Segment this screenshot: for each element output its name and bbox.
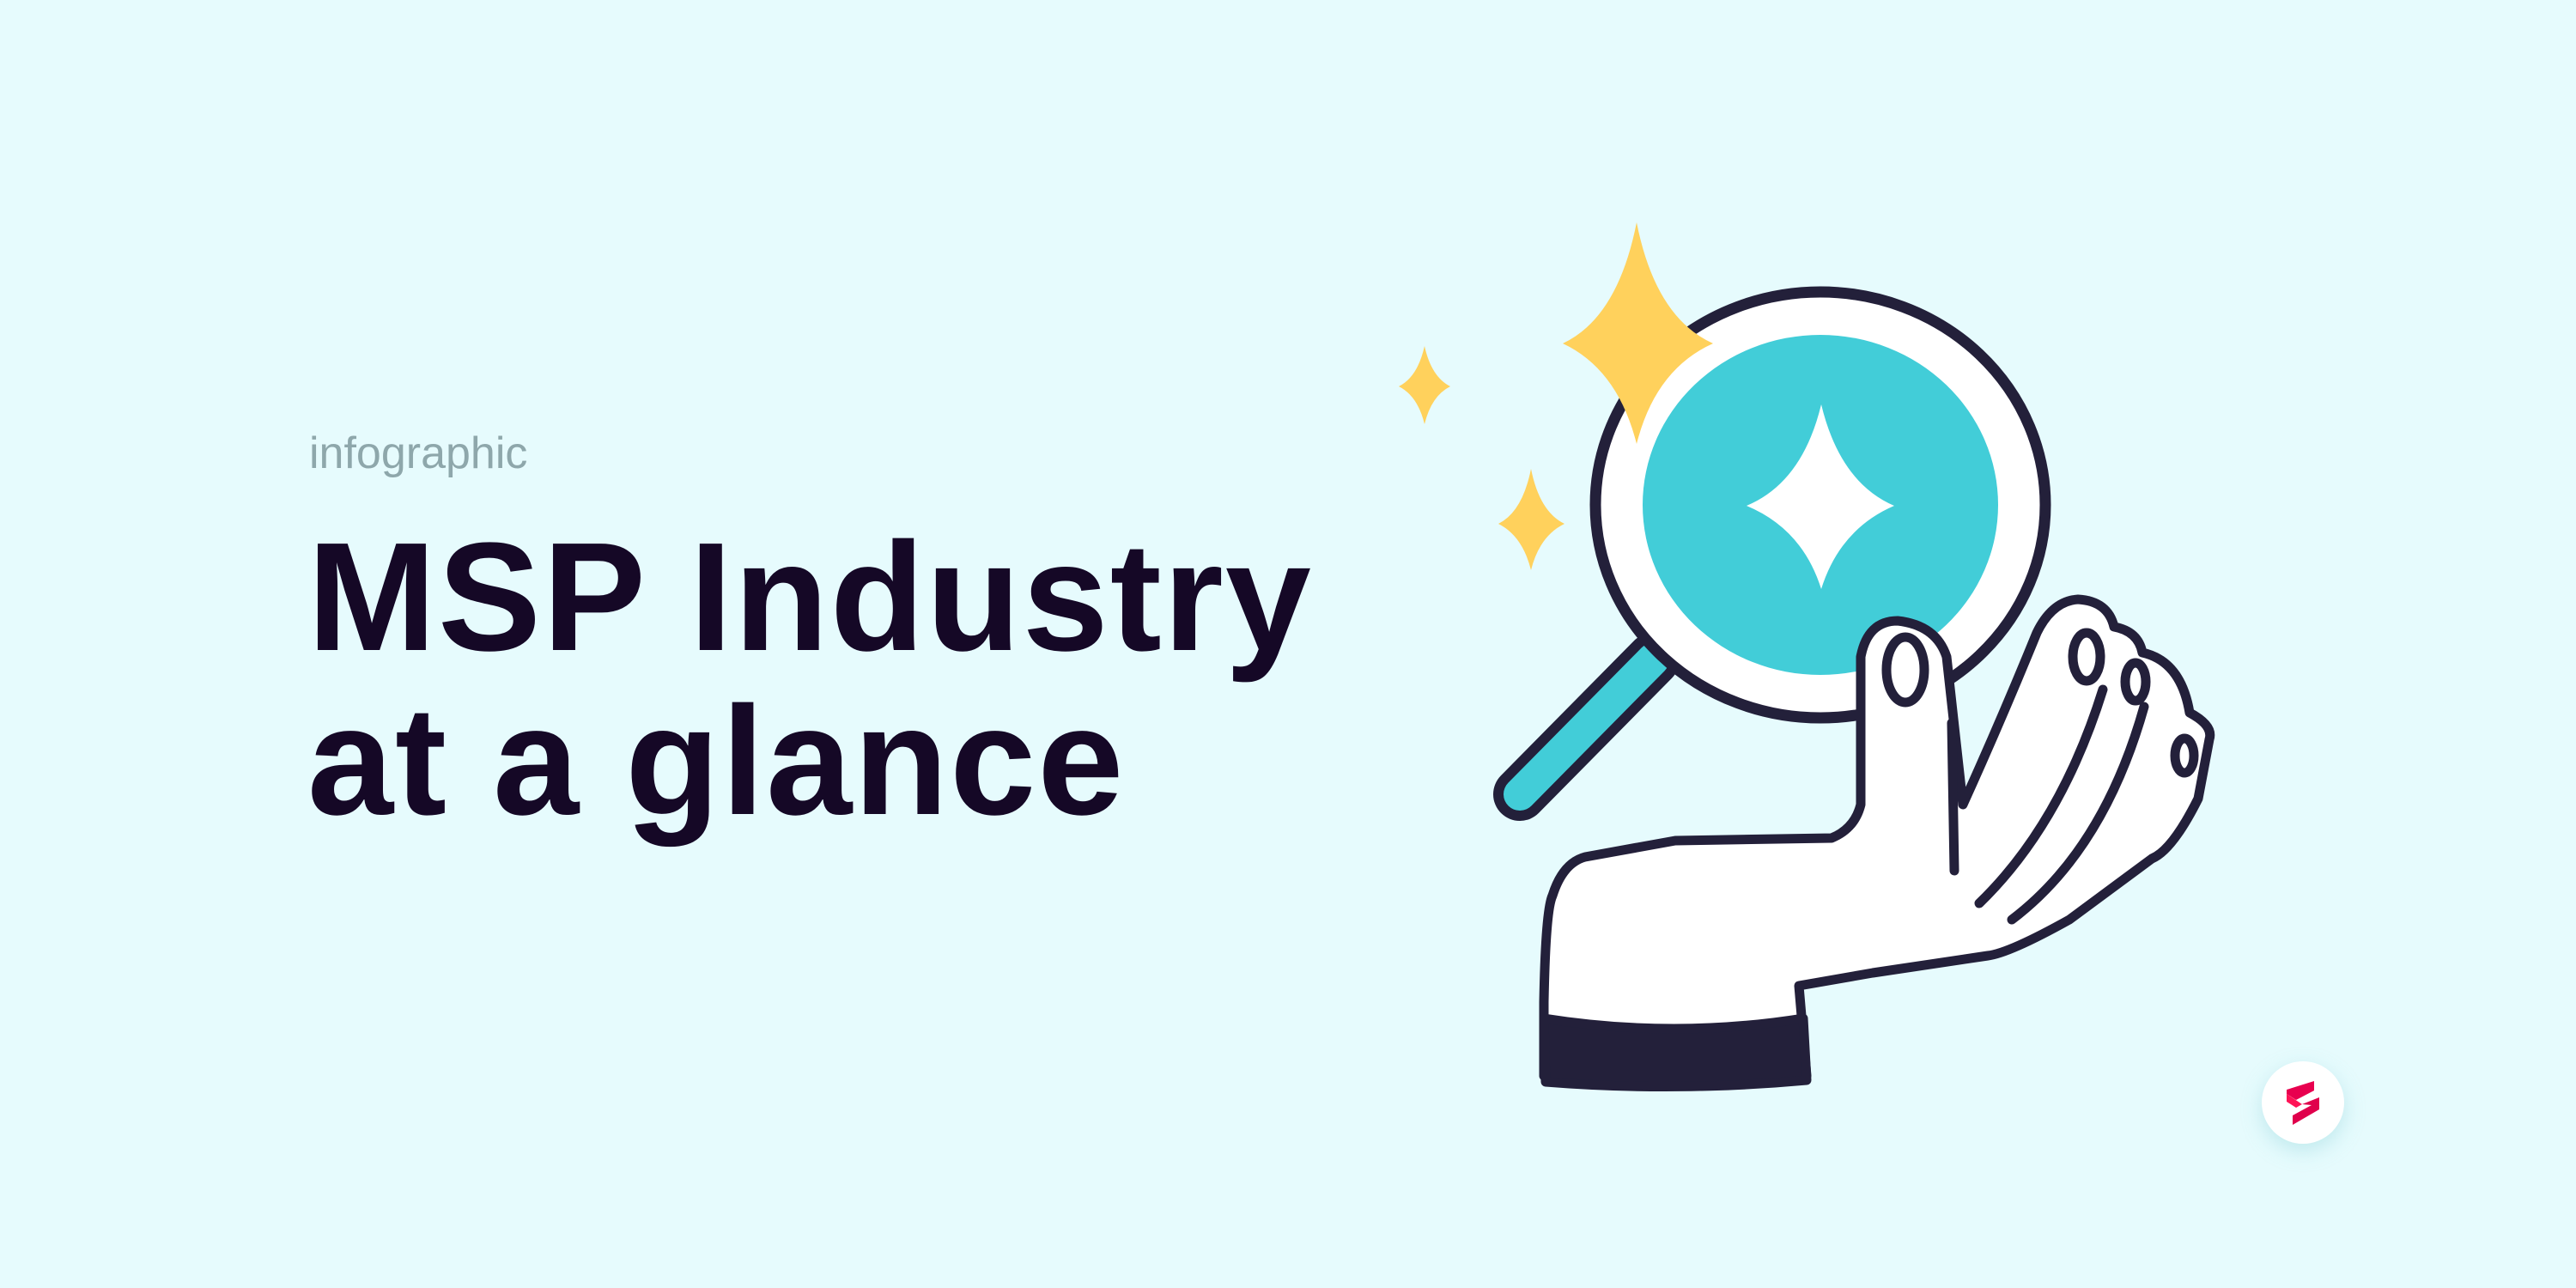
icon: small sparkle 1	[1399, 346, 1450, 424]
icon: magnifier handle	[1520, 659, 1653, 794]
title: at a glance	[307, 675, 1125, 848]
icon: small sparkle 2	[1498, 469, 1564, 570]
kicker text: infographic	[309, 428, 527, 478]
icon: magnifier lens	[1595, 292, 2045, 718]
icon: big sparkle	[1563, 222, 1713, 444]
title: MSP Industry	[307, 511, 1313, 683]
icon: hand	[1544, 599, 2210, 1087]
logo badge	[2262, 1061, 2344, 1144]
title	[307, 511, 1313, 848]
